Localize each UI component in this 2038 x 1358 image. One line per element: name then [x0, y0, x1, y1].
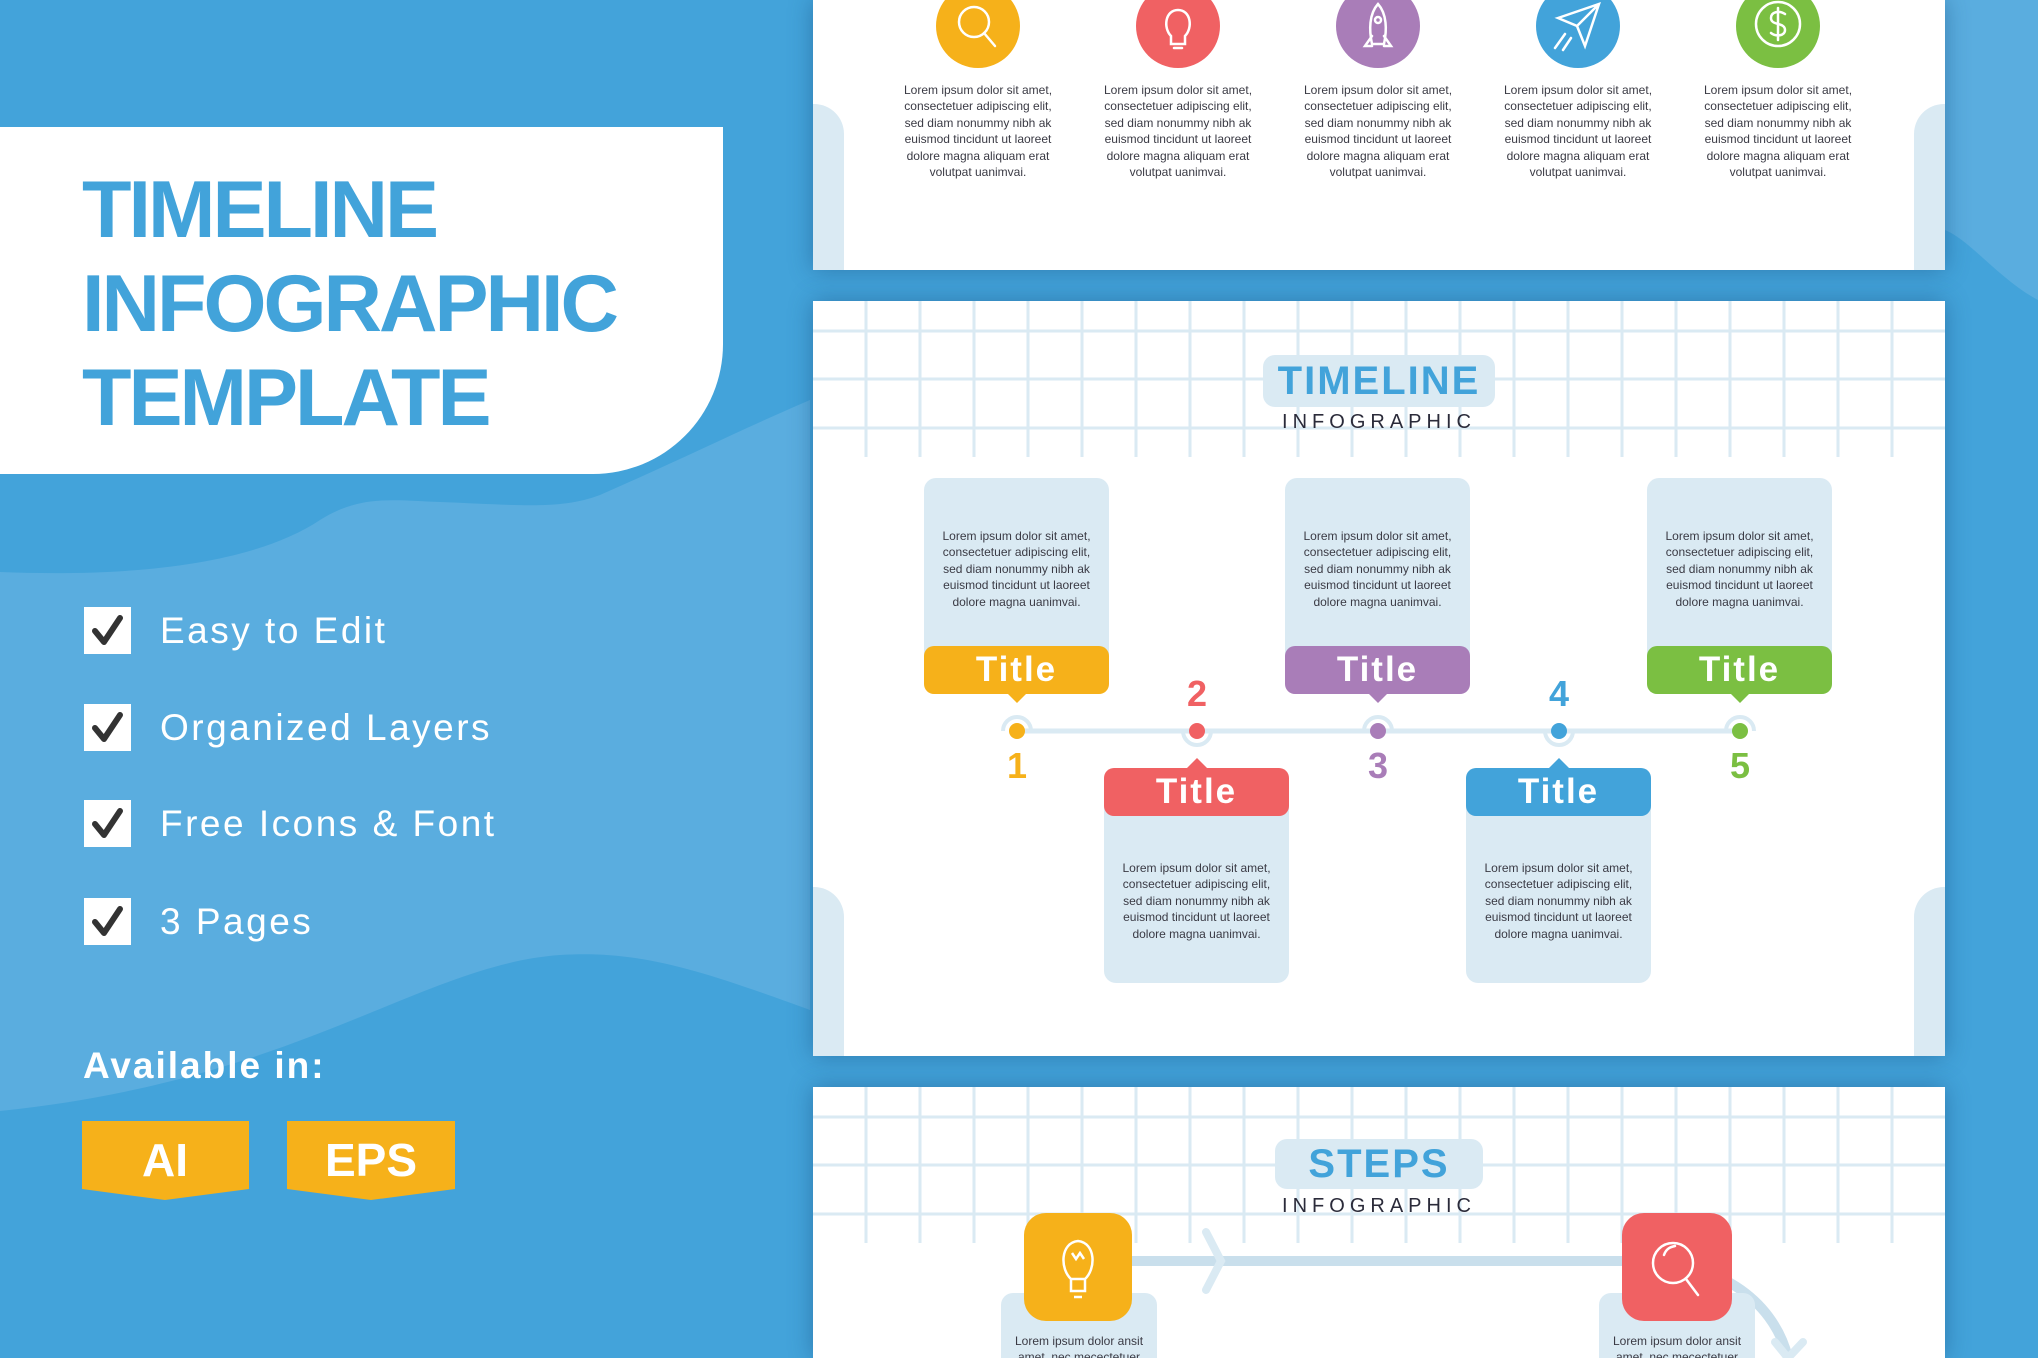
step 5: Lorem ipsum dolor sit amet, consectetuer adipiscing elit, sed diam nonummy nibh ak euismod tincidunt ut laoreet dolore magna uanimvai. [1665, 529, 1814, 609]
heading [1275, 1139, 1483, 1217]
step 1 [924, 478, 1109, 703]
badge: EPS: EPS [325, 1134, 417, 1186]
title card [0, 127, 723, 474]
step 1: Title [976, 650, 1057, 689]
panel: icons page: Lorem ipsum dolor sit amet, consectetuer adipiscing elit, sed diam nonummy nibh ak euismod tincidunt ut laoreet dolore magna aliquam erat volutpat uanimvai. [1304, 83, 1452, 179]
checkbox 2 [84, 704, 131, 751]
step 5 [1647, 478, 1832, 703]
feature text 4: 3 Pages [160, 901, 313, 942]
feature text 3: Free Icons & Font [160, 803, 497, 844]
step 2: Title [1156, 772, 1237, 811]
panel: icons page [813, 0, 1945, 270]
step 4: Lorem ipsum dolor sit amet, consectetuer adipiscing elit, sed diam nonummy nibh ak euismod tincidunt ut laoreet dolore magna uanimvai. [1484, 861, 1633, 941]
heading [1263, 355, 1495, 433]
text blocks: Lorem ipsum dolor sit amet, consectetuer adipiscing elit, sed diam nonummy nibh ak euismod tincidunt ut laoreet dolore magna aliquam erat volutpat uanimvai. [904, 83, 1052, 179]
step 3 [1285, 478, 1470, 703]
step 4 [1466, 758, 1651, 983]
title: TEMPLATE [82, 353, 488, 443]
available in heading: Available in: [83, 1045, 326, 1086]
step 2: Lorem ipsum dolor sit amet, consectetuer adipiscing elit, sed diam nonummy nibh ak euismod tincidunt ut laoreet dolore magna uanimvai. [1122, 861, 1271, 941]
checkbox 3 [84, 800, 131, 847]
number 3: 3 [1368, 745, 1388, 786]
panel: timeline page [813, 301, 1945, 1056]
feature list [84, 607, 497, 945]
panel: steps page [813, 1087, 1945, 1358]
badge: AI [82, 1121, 249, 1200]
step 5: Title [1699, 650, 1780, 689]
panel: icons page: Lorem ipsum dolor sit amet, consectetuer adipiscing elit, sed diam nonummy nibh ak euismod tincidunt ut laoreet dolore magna aliquam erat volutpat uanimvai. [1504, 83, 1652, 179]
step 4: Title [1518, 772, 1599, 811]
title: INFOGRAPHIC [82, 259, 616, 349]
number 1: 1 [1007, 745, 1027, 786]
step 1: Lorem ipsum dolor sit amet, consectetuer adipiscing elit, sed diam nonummy nibh ak euismod tincidunt ut laoreet dolore magna uanimvai. [942, 529, 1091, 609]
heading: TIMELINE [1278, 359, 1480, 403]
feature text 2: Organized Layers [160, 707, 492, 748]
heading: INFOGRAPHIC [1282, 1195, 1476, 1217]
checkbox 1 [84, 607, 131, 654]
icon row [936, 0, 1820, 68]
timeline line and dots [1001, 715, 1756, 747]
number 2: 2 [1187, 673, 1207, 714]
checkbox 4 [84, 898, 131, 945]
panel: icons page: Lorem ipsum dolor sit amet, consectetuer adipiscing elit, sed diam nonummy nibh ak euismod tincidunt ut laoreet dolore magna aliquam erat volutpat uanimvai. [1704, 83, 1852, 179]
arrow path [1132, 1228, 1807, 1358]
step 3: Title [1337, 650, 1418, 689]
number 4: 4 [1549, 673, 1569, 714]
side tabs [813, 104, 844, 274]
badge: AI: AI [142, 1134, 188, 1186]
heading: INFOGRAPHIC [1282, 411, 1476, 433]
number 5: 5 [1730, 745, 1750, 786]
side tabs [813, 887, 844, 1067]
panel: icons page: Lorem ipsum dolor sit amet, consectetuer adipiscing elit, sed diam nonummy nibh ak euismod tincidunt ut laoreet dolore magna aliquam erat volutpat uanimvai. [1104, 83, 1252, 179]
step 3: Lorem ipsum dolor sit amet, consectetuer adipiscing elit, sed diam nonummy nibh ak euismod tincidunt ut laoreet dolore magna uanimvai. [1303, 529, 1452, 609]
heading: STEPS [1308, 1142, 1450, 1186]
step card 2 [1599, 1213, 1755, 1358]
step card 1 [1001, 1213, 1157, 1358]
step 2 [1104, 758, 1289, 983]
title [82, 165, 617, 443]
badge: EPS [287, 1121, 455, 1200]
feature text 1: Easy to Edit [160, 610, 387, 651]
title: TIMELINE [82, 165, 436, 255]
